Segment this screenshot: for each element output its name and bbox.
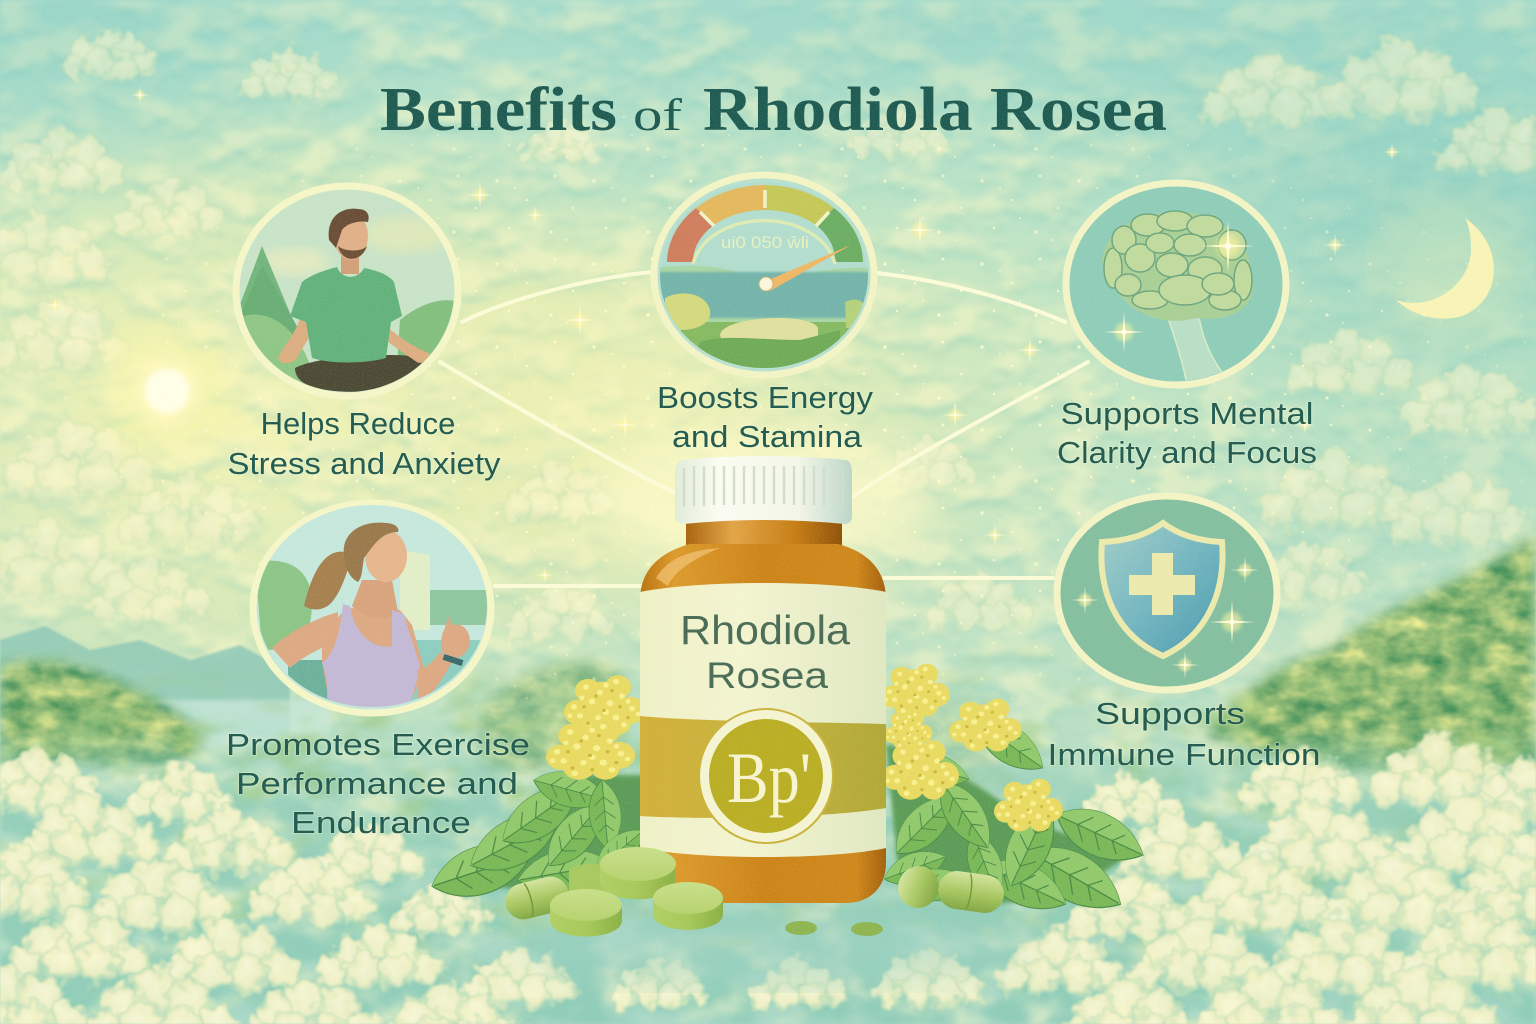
- label: stress line two: Stress and Anxiety: [228, 446, 501, 481]
- capsule right back: [892, 860, 945, 914]
- label: energy line two: and Stamina: [672, 419, 863, 454]
- label: exercise line two: Performance and: [236, 766, 518, 801]
- back tablet: [569, 864, 612, 908]
- small seed left: [785, 921, 817, 935]
- bottle highlight: [656, 548, 720, 586]
- olive band: [640, 716, 886, 818]
- circle: energy gauge: ui0 050 ŵli: [721, 233, 809, 252]
- tablet front left: [550, 889, 622, 936]
- logo badge: Bp': [727, 738, 811, 818]
- product name line two: Rosea: [706, 655, 828, 696]
- circle: stress relief, meditating man: [232, 185, 460, 400]
- capsule left: [502, 873, 572, 923]
- bottle glow: [593, 430, 933, 570]
- label: exercise: Promotes Exercise: [226, 727, 530, 762]
- connector lines: [440, 272, 1088, 586]
- label: energy: Boosts Energy: [657, 380, 874, 415]
- product name: Rhodiola: [680, 607, 850, 653]
- bottle neck: [686, 515, 842, 546]
- logo badge: [699, 709, 833, 843]
- circle: exercise, running woman: [250, 500, 495, 720]
- label: clarity line two: Clarity and Focus: [1057, 435, 1317, 470]
- bottle cap: [675, 456, 852, 524]
- crescent moon: [1380, 195, 1520, 335]
- circle: mental clarity brain tree: [1066, 183, 1286, 385]
- rhodiola plant right: [879, 664, 1152, 925]
- tablet front right: [653, 882, 723, 930]
- bottle: [640, 456, 886, 903]
- central ground haze: [520, 905, 1020, 985]
- label: immune line two: Immune Function: [1048, 737, 1320, 772]
- title: Rhodiola Rosea: [703, 76, 1167, 144]
- title: [380, 76, 1167, 144]
- sparkle field: [0, 85, 1536, 760]
- label: exercise line three: Endurance: [291, 805, 471, 840]
- landscape left: distant mountains and lake: [0, 626, 330, 745]
- foreground cloud clusters: [0, 730, 1536, 1024]
- label: clarity: Supports Mental: [1060, 396, 1314, 431]
- circle: energy gauge: [654, 175, 875, 385]
- title: Benefits: [380, 76, 617, 144]
- label: stress: Helps Reduce: [261, 406, 455, 441]
- tablet top: [600, 847, 676, 899]
- upper cloud clusters: [0, 25, 1536, 647]
- rhodiola plant left: [425, 675, 652, 909]
- foliage hills on both sides: [0, 520, 1536, 790]
- bottle label: [640, 583, 886, 857]
- foreground teal cloud shadow: [0, 720, 1536, 1024]
- sun: [77, 301, 257, 481]
- title: of: [633, 89, 683, 140]
- capsule on right: [936, 869, 1006, 915]
- foreground green canopy: [0, 658, 1534, 980]
- benefit labels: [226, 380, 1320, 840]
- circle: immune shield: [1057, 496, 1277, 690]
- small seed right: [851, 922, 883, 936]
- label: immune: Supports: [1095, 696, 1245, 731]
- bottle body: [640, 544, 886, 903]
- capsules and tablets left: [502, 847, 883, 936]
